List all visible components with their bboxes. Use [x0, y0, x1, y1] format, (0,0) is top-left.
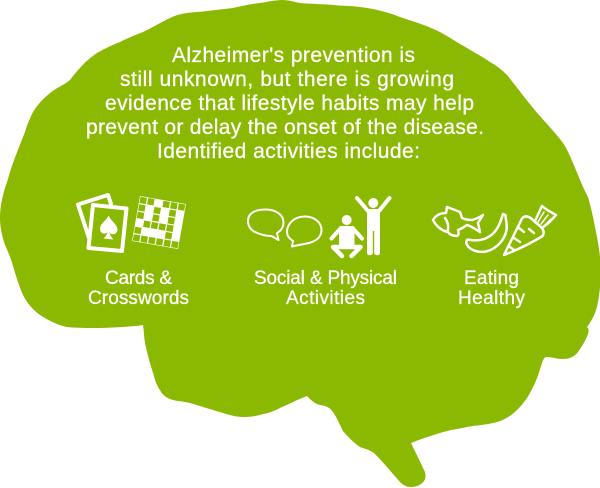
label: cards and crosswords: Cards &: [105, 268, 172, 289]
intro text: still unknown, but there is growing: [120, 68, 454, 91]
icon: carrot: [504, 206, 556, 255]
label: social and physical activities: Social & Physical: [254, 268, 397, 289]
label: eating healthy: Healthy: [458, 288, 526, 309]
label: eating healthy: [458, 268, 526, 309]
label: cards and crosswords: [88, 268, 189, 309]
label: social and physical activities: Activities: [286, 288, 365, 309]
icon: crossword grid: [132, 196, 186, 249]
intro text: [86, 44, 484, 163]
label: social and physical activities: [254, 268, 397, 309]
icon: banana: [466, 214, 507, 252]
icon: squatting person: [332, 215, 362, 256]
intro text: prevent or delay the onset of the disease.: [86, 116, 484, 139]
icon: speech bubbles: [248, 210, 322, 246]
intro text: Alzheimer's prevention is: [172, 44, 415, 67]
icon: fish: [433, 207, 483, 236]
intro text: Identified activities include:: [157, 140, 420, 163]
icon: playing cards: [78, 195, 126, 251]
intro text: evidence that lifestyle habits may help: [105, 92, 474, 115]
icon: standing person with raised arms: [357, 198, 390, 255]
label: eating healthy: Eating: [464, 268, 519, 289]
label: cards and crosswords: Crosswords: [88, 288, 189, 309]
